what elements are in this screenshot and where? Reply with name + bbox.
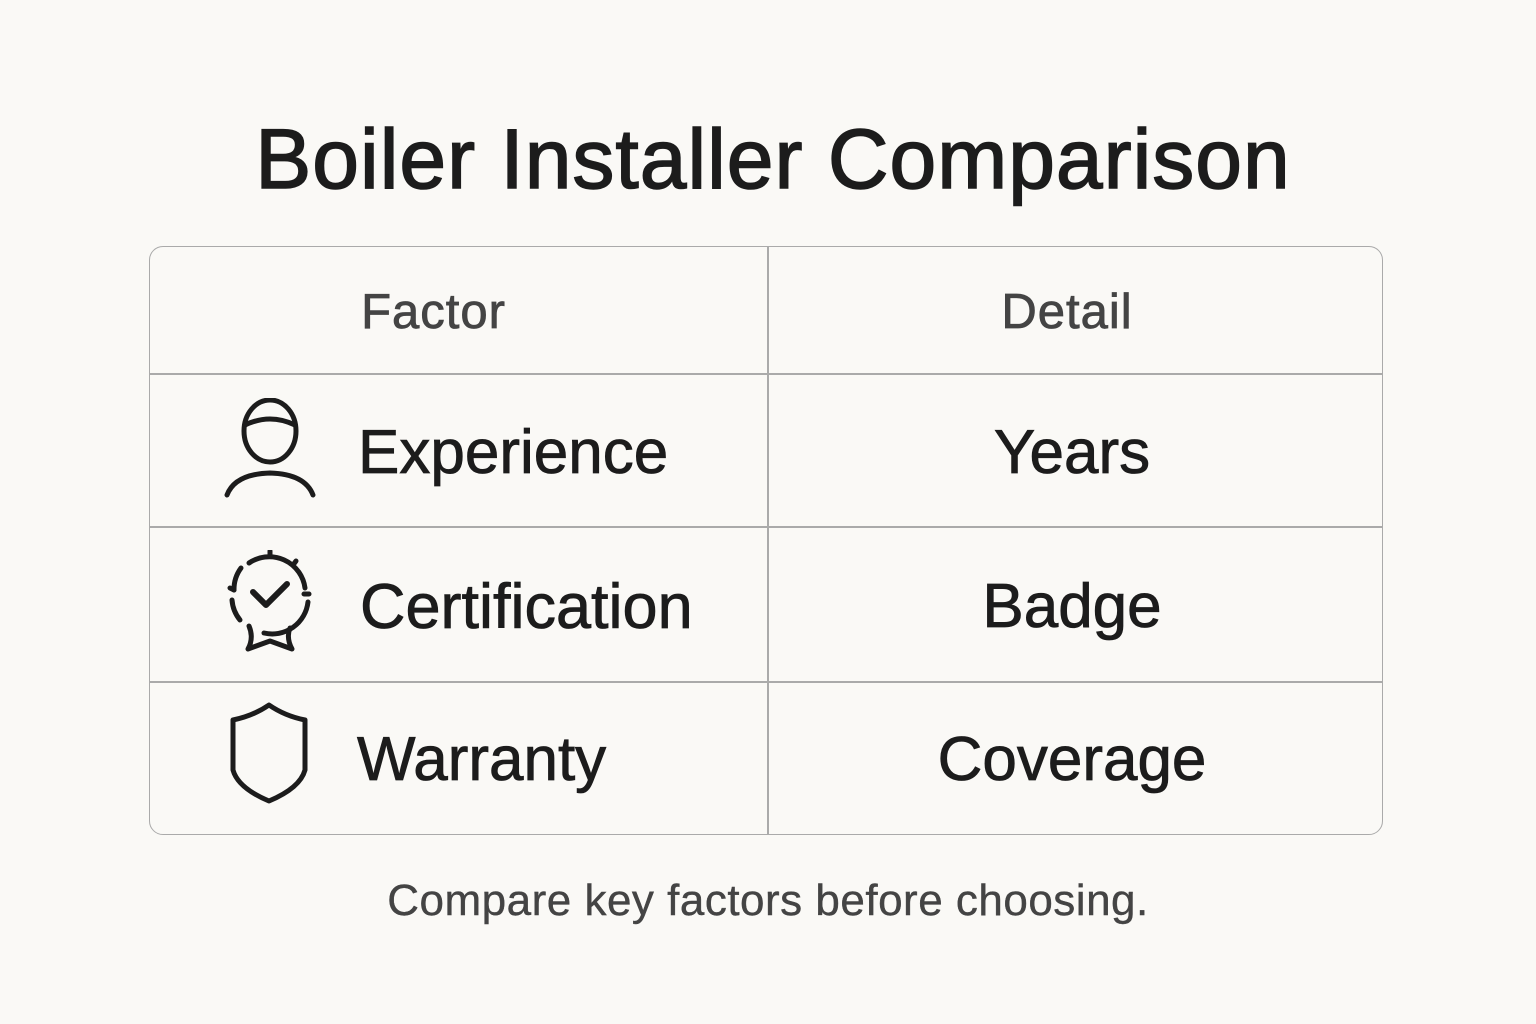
header: Detail: Detail	[1001, 285, 1133, 339]
detail: Years: Years	[994, 418, 1150, 487]
icon: person	[224, 398, 316, 498]
row: Certification: Certification	[360, 572, 693, 642]
table	[149, 246, 1383, 835]
column divider	[767, 247, 768, 834]
header: Factor: Factor	[361, 285, 506, 339]
title: Boiler Installer Comparison	[255, 112, 1291, 206]
footer caption: Compare key factors before choosing.	[387, 876, 1149, 925]
detail: Badge: Badge	[982, 572, 1162, 641]
detail: Coverage: Coverage	[938, 725, 1206, 794]
icon: certification badge	[228, 550, 312, 652]
icon: shield	[230, 702, 308, 804]
row: Experience: Experience	[358, 418, 668, 487]
row: Warranty: Warranty	[357, 725, 606, 794]
